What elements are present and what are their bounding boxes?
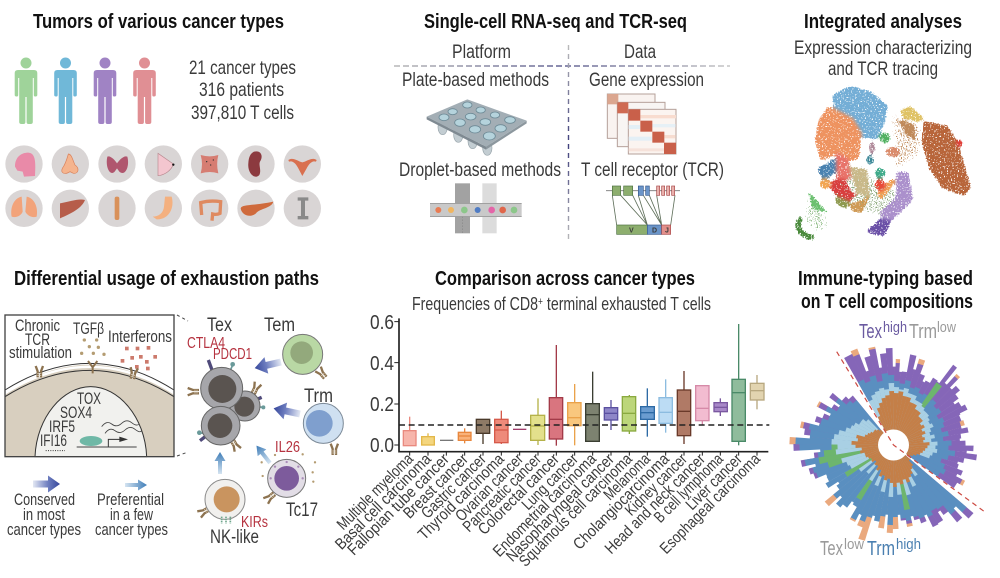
- text: integrated analyses subtitle: [794, 38, 972, 80]
- text: Tex low Trm high label: Tex: [820, 538, 843, 560]
- text: Tex high Trm low label: Trm: [909, 321, 937, 343]
- icon: four patients: [15, 58, 156, 124]
- panel: single-cell RNA-seq and TCR-seq: [394, 11, 730, 243]
- x axis cancer type labels: Endometrial carcinoma: [490, 451, 600, 560]
- x axis cancer type labels: Basal cell carcinoma: [332, 451, 435, 553]
- text: red marker genes: [187, 335, 300, 531]
- text: stimuli labels: [9, 317, 172, 362]
- text: cohort statistics: [189, 57, 296, 124]
- text: column and row labels: Plate-based methods: [402, 70, 549, 91]
- chart: box plots: [332, 312, 769, 570]
- panel: tumors of various cancer types: [5, 11, 321, 227]
- x axis cancer type labels: Esophageal carcinoma: [657, 451, 764, 558]
- text: transcription factors: IFI16: [40, 432, 67, 450]
- legend: arrows: in a few: [110, 506, 153, 524]
- x axis cancer type labels: Kidney cancer: [622, 450, 691, 519]
- text: red marker genes: IL26: [275, 439, 300, 456]
- legend: arrows: Conserved: [14, 491, 75, 509]
- x axis cancer type labels: Liver cancer: [683, 450, 746, 514]
- text: cohort statistics: 316 patients: [199, 79, 284, 101]
- panel: differential usage of exhaustion paths: [5, 268, 343, 548]
- text: red marker genes: PDCD1: [213, 346, 252, 363]
- text: stimuli labels: TGFβ: [73, 320, 104, 338]
- text: column and row labels: Data: [624, 42, 656, 63]
- icon: multi-well plate: [427, 99, 527, 155]
- legend: arrows: Preferential: [97, 491, 164, 509]
- text: transcription factors: [40, 390, 101, 450]
- legend: arrows: cancer types: [95, 521, 168, 539]
- text: column and row labels: Droplet-based methods: [399, 160, 561, 181]
- text: Tex high Trm low label: [859, 319, 956, 343]
- text: transcription factors: SOX4: [60, 404, 92, 422]
- y axis tick labels: 0.2: [370, 394, 394, 416]
- text: Tex high Trm low label: low: [937, 319, 956, 336]
- y axis tick labels: 0.0: [370, 435, 394, 457]
- text: V D J segment labels: D: [652, 228, 657, 234]
- icon: droplet microfluidics: [430, 183, 522, 233]
- text: T cell state names: Tc17: [286, 500, 318, 521]
- y axis tick labels: 0.6: [370, 312, 394, 334]
- text: cohort statistics: 21 cancer types: [189, 57, 296, 79]
- chart: UMAP scatter of T cell clusters: [798, 85, 972, 238]
- heading: immune-typing: Immune-typing based: [798, 268, 973, 290]
- arrow: Tem to Tex: [253, 354, 283, 376]
- panel: immune-typing: [774, 268, 998, 560]
- panel: integrated analyses: [794, 11, 972, 238]
- x axis cancer type labels: Colorectal cancer: [475, 450, 563, 538]
- text: column and row labels: Gene expression: [589, 70, 704, 91]
- chart: radial stacked bars: [774, 333, 998, 547]
- text: stimuli labels: Interferons: [108, 328, 172, 346]
- text: column and row labels: [399, 42, 724, 181]
- text: transcription factors: TOX: [77, 390, 101, 408]
- heading: integrated analyses: Integrated analyses: [804, 11, 962, 33]
- x axis cancer type labels: Gastric cancer: [418, 450, 490, 522]
- text: V D J segment labels: V: [629, 228, 634, 234]
- y axis tick labels: 0.4: [370, 353, 394, 375]
- x axis cancer type labels: Lung cancer: [519, 450, 582, 514]
- text: Tex low Trm high label: Trm: [867, 538, 895, 560]
- text: Tex high Trm low label: high: [883, 319, 907, 336]
- x axis cancer type labels: [332, 450, 764, 570]
- icons: organ grid: [5, 145, 321, 227]
- arrow: Trm to Tex: [272, 400, 302, 422]
- text: T cell state names: Tem: [264, 315, 295, 336]
- x axis cancer type labels: Fallopian tube cancer: [345, 450, 453, 559]
- text: chart subtitle: Frequencies of CD8: [412, 293, 577, 314]
- icon: expression heatmaps: [607, 94, 676, 154]
- text: chart subtitle: +: [538, 296, 543, 308]
- x axis cancer type labels: B cell lymphoma: [651, 451, 727, 526]
- text: red marker genes: KIRs: [241, 514, 268, 531]
- heading: comparison: Comparison across cancer types: [435, 268, 695, 290]
- text: stimuli labels: Chronic: [15, 317, 60, 335]
- icon: TCR gene segments: [606, 186, 680, 234]
- text: stimuli labels: TCR: [25, 331, 50, 349]
- x axis cancer type labels: Head and neck cancer: [602, 450, 709, 558]
- heading: tumors: Tumors of various cancer types: [33, 11, 284, 33]
- text: integrated analyses subtitle: and TCR tracing: [828, 59, 938, 80]
- x axis cancer type labels: Pancreatic cancer: [460, 450, 545, 536]
- x axis cancer type labels: Multiple myeloma: [334, 451, 417, 534]
- x axis cancer type labels: Nasopharyngeal cancer: [503, 450, 618, 565]
- heading: sequencing: Single-cell RNA-seq and TCR-seq: [424, 11, 687, 33]
- diagram: T cell states: [188, 334, 343, 523]
- text: Tex high Trm low label: Tex: [859, 321, 882, 343]
- text: T cell state names: Trm: [304, 386, 333, 407]
- text: transcription factors: IRF5: [49, 418, 75, 436]
- text: column and row labels: Platform: [452, 42, 511, 63]
- arrow: NK-like to Tex: [214, 452, 226, 474]
- x axis cancer type labels: Ovarian cancer: [453, 450, 527, 525]
- text: T cell state names: Tex: [207, 315, 232, 336]
- text: cohort statistics: 397,810 T cells: [191, 102, 294, 124]
- x axis cancer type labels: Squamous cell carcinoma: [516, 451, 636, 570]
- legend: arrows: [7, 476, 168, 539]
- text: Tex low Trm high label: low: [844, 536, 864, 553]
- text: Tex low Trm high label: [820, 536, 921, 560]
- text: Tex low Trm high label: high: [896, 536, 921, 553]
- text: chart subtitle: terminal exhausted T cells: [543, 293, 711, 314]
- legend: arrows: in most: [23, 506, 65, 524]
- text: T cell state names: NK-like: [210, 527, 259, 548]
- diagram: T cell zoomed view: [5, 315, 174, 457]
- text: V D J segment labels: J: [665, 228, 669, 234]
- x axis cancer type labels: Cholangiocarcinoma: [570, 451, 673, 553]
- arrow: Tc17 to Tex: [252, 442, 274, 466]
- x axis cancer type labels: Breast cancer: [400, 450, 472, 522]
- panel: comparison across cancer types: [332, 268, 769, 570]
- text: T cell state names: [207, 315, 333, 548]
- heading: exhaustion paths: Differential usage of exhaustion paths: [14, 268, 319, 290]
- text: V D J segment labels: [629, 228, 669, 234]
- y axis tick labels: [370, 312, 394, 457]
- heading: immune-typing: [798, 268, 973, 313]
- legend: arrows: cancer types: [7, 521, 81, 539]
- text: stimuli labels: stimulation: [9, 344, 72, 362]
- text: column and row labels: T cell receptor (TCR): [581, 160, 724, 181]
- x axis cancer type labels: Melanoma: [601, 451, 654, 504]
- x axis cancer type labels: Thyroid carcinoma: [415, 451, 508, 543]
- text: red marker genes: CTLA4: [187, 335, 225, 352]
